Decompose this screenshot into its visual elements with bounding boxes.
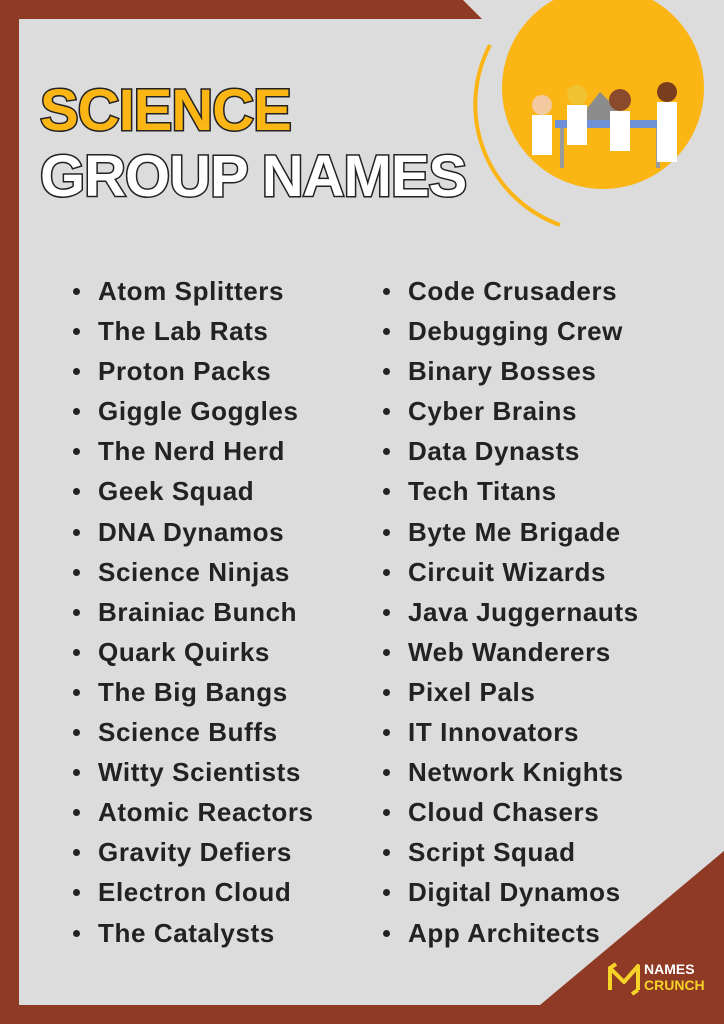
list: left column: The Catalysts bbox=[98, 918, 275, 948]
illustration circle bbox=[473, 0, 704, 227]
list: right column: Data Dynasts bbox=[408, 436, 580, 466]
list: left column: Gravity Defiers bbox=[98, 837, 292, 867]
list: right column: IT Innovators bbox=[408, 717, 579, 747]
list: right column: Java Juggernauts bbox=[408, 597, 639, 627]
list: left column: Electron Cloud bbox=[98, 877, 291, 907]
list: left column: The Big Bangs bbox=[98, 677, 288, 707]
list: right column: Code Crusaders bbox=[408, 276, 617, 306]
list: right column bbox=[383, 276, 639, 948]
list: left column: DNA Dynamos bbox=[98, 517, 284, 547]
list: right column: Circuit Wizards bbox=[408, 557, 606, 587]
list: right column: Network Knights bbox=[408, 757, 624, 787]
list: left column: Quark Quirks bbox=[98, 637, 270, 667]
list: right column: Binary Bosses bbox=[408, 356, 596, 386]
list: right column: Cyber Brains bbox=[408, 396, 577, 426]
list: right column: App Architects bbox=[408, 918, 600, 948]
list: left column: Proton Packs bbox=[98, 356, 271, 386]
list: left column: Witty Scientists bbox=[98, 757, 301, 787]
list: right column: Pixel Pals bbox=[408, 677, 535, 707]
logo bbox=[608, 961, 705, 996]
list: right column: Tech Titans bbox=[408, 476, 557, 506]
list: left column: Science Ninjas bbox=[98, 557, 290, 587]
list: left column: Atom Splitters bbox=[98, 276, 284, 306]
list: right column: Web Wanderers bbox=[408, 637, 611, 667]
list: left column: Giggle Goggles bbox=[98, 396, 299, 426]
list: left column bbox=[73, 276, 314, 948]
list: left column: Geek Squad bbox=[98, 476, 254, 506]
list: left column: Atomic Reactors bbox=[98, 797, 314, 827]
list: right column: Script Squad bbox=[408, 837, 576, 867]
list: right column: Byte Me Brigade bbox=[408, 517, 621, 547]
list: left column: The Nerd Herd bbox=[98, 436, 285, 466]
list: left column: Science Buffs bbox=[98, 717, 278, 747]
icon: scientists at table bbox=[532, 82, 677, 168]
list: right column: Debugging Crew bbox=[408, 316, 623, 346]
list: right column: Digital Dynamos bbox=[408, 877, 621, 907]
title: GROUP NAMES bbox=[40, 144, 466, 209]
list: left column: Brainiac Bunch bbox=[98, 597, 297, 627]
title bbox=[40, 78, 466, 209]
list: left column: The Lab Rats bbox=[98, 316, 268, 346]
logo: NAMES bbox=[644, 961, 695, 977]
title: SCIENCE bbox=[40, 78, 291, 143]
logo: CRUNCH bbox=[644, 977, 705, 993]
list: right column: Cloud Chasers bbox=[408, 797, 599, 827]
